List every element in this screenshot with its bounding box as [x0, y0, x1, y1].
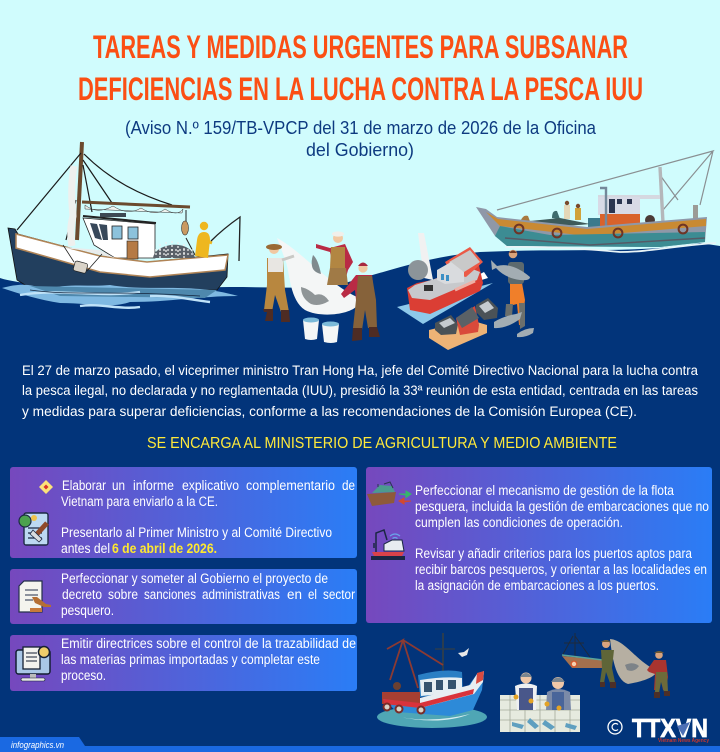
illustration: crates on pallet	[429, 298, 498, 350]
icon: document with stamp	[19, 513, 48, 545]
text: report: informe	[133, 478, 174, 493]
title	[78, 29, 643, 107]
intro paragraph: y medidas para superar deficiencias, conforme a las recomendaciones de la Comisión Europea (CE).	[22, 404, 637, 419]
text: report	[61, 478, 355, 556]
text: traceability	[61, 636, 356, 683]
icon: diamond bullet	[39, 480, 53, 494]
logo: TTXVN: Vietnam News Agency	[658, 738, 709, 744]
text: report: Vietnam para enviarlo a la CE.	[61, 494, 218, 509]
text: report: 6 de abril de 2026.	[112, 541, 217, 556]
text: report: explicativo	[182, 478, 239, 493]
text: report: de	[342, 478, 355, 493]
icon: connected ship	[371, 530, 405, 560]
icon: computer with gear	[16, 646, 50, 681]
illustration: boat and net team	[562, 633, 670, 698]
text: decree	[61, 571, 355, 618]
panel: traceability task	[10, 635, 357, 691]
copyright symbol	[608, 720, 622, 734]
illustration: fishermen with net	[263, 231, 380, 343]
illustration: blue fishing boat	[377, 633, 487, 728]
text: traceability: proceso.	[61, 668, 106, 683]
text: fleet: Perfeccionar el mecanismo de gestión de la flota	[415, 483, 674, 498]
subtitle: del Gobierno)	[306, 140, 414, 160]
text: fleet: cumplen las condiciones de operación.	[415, 515, 623, 530]
text: decree: el	[308, 587, 317, 602]
text: decree: sobre	[108, 587, 138, 602]
illustration: red ship on platform	[397, 233, 493, 324]
background: sea	[0, 243, 720, 752]
footer bar: infographics.vn	[11, 740, 64, 750]
intro paragraph: la pesca ilegal, no declarada y no reglamentada (IUU), presidió la 33ª reunión de esta entidad, centrada en las tareas	[22, 383, 698, 398]
footer bar	[0, 737, 720, 752]
subtitle	[125, 118, 597, 160]
text: report: Elaborar	[62, 478, 106, 493]
text: decree: en	[287, 587, 302, 602]
text: ports: la asignación de embarcaciones a los puertos.	[415, 578, 659, 593]
logo: TTXVN: TTXVN	[632, 713, 708, 743]
text: fleet	[415, 483, 709, 530]
text: decree: pesquero.	[61, 603, 114, 618]
illustration: workers sorting fish	[500, 672, 580, 732]
subtitle: (Aviso N.º 159/TB-VPCP del 31 de marzo de 2026 de la Oficina	[125, 118, 597, 138]
panel: fleet and ports tasks	[366, 467, 712, 623]
illustration: fishing boat right	[476, 151, 716, 252]
text: ports	[415, 546, 707, 593]
text: traceability: Emitir directrices sobre el control de la trazabilidad de	[61, 636, 356, 651]
icon: decree and gavel	[19, 581, 51, 612]
illustration: fisherman holding fish	[491, 250, 534, 337]
text: decree: administrativas	[202, 587, 280, 602]
panel: report task	[10, 467, 357, 558]
text: report: un	[112, 478, 125, 493]
section heading: SE ENCARGA AL MINISTERIO DE AGRICULTURA Y MEDIO AMBIENTE	[147, 435, 617, 452]
intro paragraph: El 27 de marzo pasado, el viceprimer ministro Tran Hong Ha, jefe del Comité Directivo Nacional para la lucha contra	[22, 363, 698, 378]
icon: fleet management	[367, 482, 411, 506]
text: report: Presentarlo al Primer Ministro y al Comité Directivo	[61, 525, 332, 540]
text: report: antes del	[61, 541, 110, 556]
intro paragraph	[22, 363, 698, 419]
text: traceability: las materias primas importadas y completar este	[61, 652, 320, 667]
text: decree: decreto	[62, 587, 102, 602]
text: report: complementario	[246, 478, 335, 493]
text: decree: sector	[323, 587, 355, 602]
illustration: fishing boat left	[2, 142, 240, 308]
panel: decree task	[10, 569, 357, 624]
text: decree: Perfeccionar y someter al Gobierno el proyecto de	[61, 571, 328, 586]
text: decree: sanciones	[144, 587, 196, 602]
